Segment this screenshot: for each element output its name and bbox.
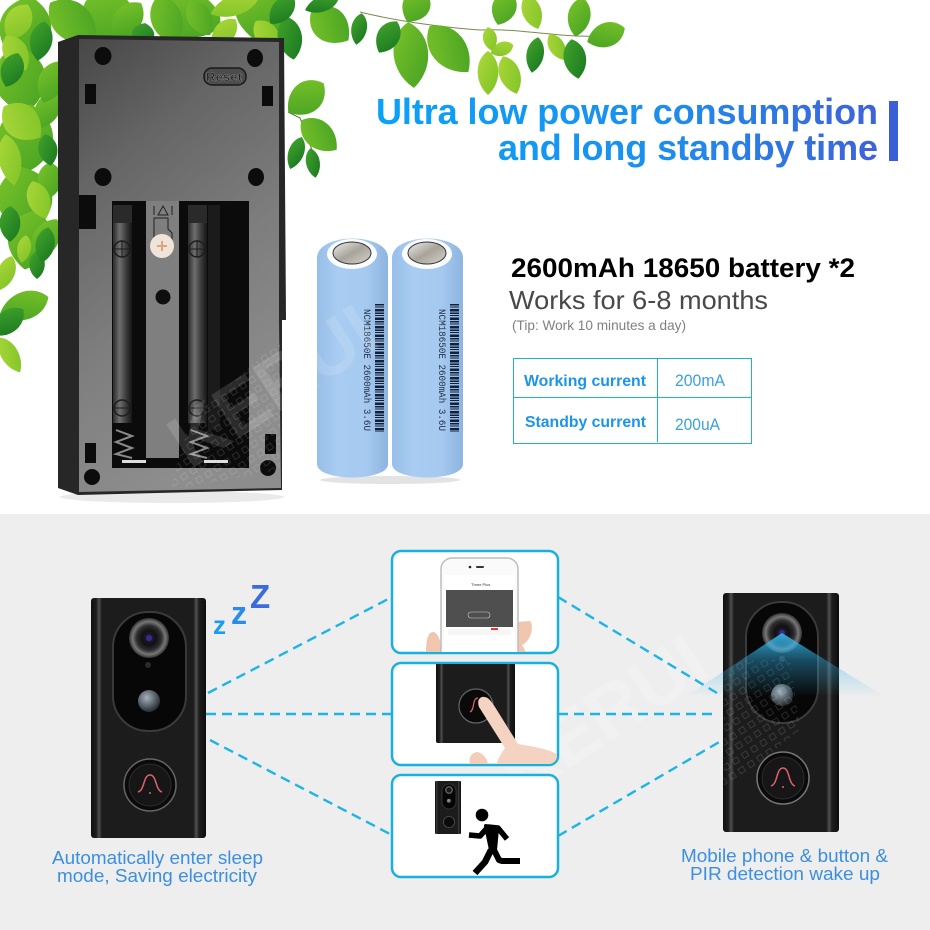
- caption: sleep mode: Automatically enter sleep: [52, 848, 263, 868]
- running person: [469, 809, 520, 873]
- watermark pattern on device: [724, 660, 800, 790]
- mini doorbell: [435, 781, 461, 834]
- ground shadow: [60, 491, 284, 503]
- dashed connector lines: [206, 597, 721, 836]
- grey lower band: [0, 514, 930, 930]
- panel: mobile phone wake up: [392, 551, 558, 668]
- smartphone: Three Plus: [471, 582, 490, 587]
- doorbell lower half: [436, 660, 515, 743]
- current specification table: 200mA: [675, 372, 725, 390]
- camera lens: [762, 613, 802, 653]
- watermark pattern on device: [170, 340, 280, 490]
- PIR sensor: [771, 684, 793, 706]
- battery compartment: [112, 201, 249, 468]
- foliage: green leaves along the top and left edges: [0, 0, 629, 377]
- caption: wake up methods: Mobile phone & button &: [681, 846, 888, 866]
- battery specification text: [509, 253, 855, 333]
- battery specification text: 2600mAh 18650 battery *2: [511, 253, 855, 283]
- reset button: [204, 68, 246, 85]
- current specification table: [514, 358, 752, 444]
- battery left: NCM18650E 2600mAh 3.6U: [360, 309, 372, 431]
- left battery contact rail: [113, 205, 146, 463]
- battery specification text: (Tip: Work 10 minutes a day): [512, 317, 686, 333]
- bell button: [124, 759, 176, 811]
- camera panel: [113, 612, 186, 731]
- caption: wake up methods: [681, 846, 888, 884]
- detection beam: [688, 633, 882, 695]
- caption: wake up methods: PIR detection wake up: [690, 864, 880, 884]
- bell button: [757, 752, 809, 804]
- battery shadow: [320, 476, 460, 484]
- battery right: NCM18650E 2600mAh 3.6U: [435, 309, 447, 431]
- device back with battery compartment: [58, 35, 286, 503]
- doorbell: sleeping state: [91, 598, 206, 838]
- watermark: KERUI: [484, 618, 722, 813]
- title: Ultra low power consumption: [376, 91, 878, 132]
- reset button: Reset: [206, 70, 242, 84]
- watermark: [154, 288, 722, 813]
- hand holding phone: [426, 621, 532, 652]
- battery right: [392, 238, 463, 478]
- sleep z icon: Z: [250, 578, 270, 615]
- camera panel: [746, 602, 818, 723]
- caption: sleep mode: [52, 848, 263, 886]
- grey inner plate: [79, 39, 281, 492]
- current specification table: Standby current: [525, 414, 647, 431]
- right battery contact rail: [188, 205, 228, 463]
- camera lens: [129, 618, 169, 658]
- title: [376, 91, 878, 168]
- sleep z icon: z: [231, 595, 247, 631]
- centre divider: [146, 201, 179, 458]
- current specification table: 200uA: [675, 416, 720, 434]
- battery left: [317, 238, 388, 478]
- doorbell: awake state: [723, 593, 839, 832]
- title: and long standby time: [498, 127, 878, 168]
- battery specification text: Works for 6-8 months: [509, 285, 768, 315]
- batteries: [317, 238, 463, 484]
- current specification table: Working current: [524, 373, 647, 390]
- panel: button press wake up: [392, 660, 558, 766]
- pressing finger: [478, 697, 558, 766]
- watermark: KERUI: [154, 288, 392, 483]
- panel: PIR motion wake up: [392, 775, 558, 877]
- sleep z icon: [213, 578, 270, 640]
- sleep z icon: z: [213, 610, 226, 640]
- outer casing: [58, 35, 286, 495]
- mounting holes: [79, 47, 276, 485]
- caption: sleep mode: mode, Saving electricity: [57, 866, 257, 886]
- title accent bar: [889, 101, 898, 161]
- PIR sensor: [138, 690, 160, 712]
